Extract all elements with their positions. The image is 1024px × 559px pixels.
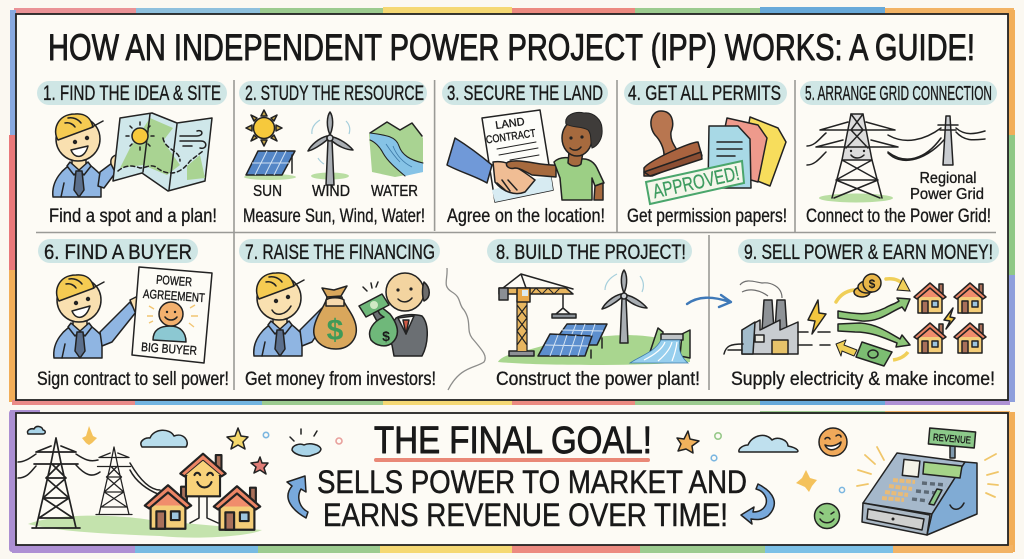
caption: step 9: Supply electricity & make income! [731,369,995,390]
caption: step 3: Agree on the location! [447,206,605,227]
icon: land contract [482,110,553,202]
panel: step 1 find the idea and site [37,81,227,227]
icon: lightning and power line [798,300,830,345]
panel: step 7 raise the financing [239,239,485,390]
icon: land contract: CONTRACT [485,128,537,146]
caption: step 2: Measure Sun, Wind, Water! [243,206,425,227]
icon: wind turbine [602,270,647,343]
icon: investor with cash [359,273,429,356]
icon: permit papers [708,117,786,188]
labels: sun wind water: WATER [371,183,418,200]
decorative squiggle [446,268,485,390]
heading: step 4: 4. GET ALL PERMITS [628,82,781,105]
top panel frame [9,7,1015,405]
icon: wind turbine [308,112,353,185]
heading: step 3 [442,81,608,105]
icon: three houses with smile [145,454,260,530]
icon: engineer with money bag [254,273,356,356]
icon: green ground [28,516,262,538]
icon: sun and solar panel [244,110,296,180]
arrow: step 8 to step 9 [687,295,731,307]
icon: pylons with power lines [18,438,160,528]
panel: final goal banner [9,410,1015,553]
heading: step 6: 6. FIND A BUYER [44,241,192,264]
icon: map with sun and wind [113,113,212,191]
icon: handshake [447,138,556,194]
heading: step 7 [239,239,440,264]
heading: step 2: 2. STUDY THE RESOURCE [245,82,424,105]
panel: step 6 find a buyer [37,239,229,390]
poster: power agreement: AGREEMENT [143,287,206,305]
panel: step 9 sell power and earn money [724,239,999,390]
heading: step 8: 8. BUILD THE PROJECT! [496,241,686,264]
icon: power lines and pole [807,116,985,165]
icon: green ground [498,335,690,365]
stamp: approved: APPROVED! [651,163,742,203]
labels: sun wind water: SUN [253,183,282,200]
icon: engineer with money bag: $ [327,314,344,347]
icon: factory [724,281,798,354]
poster: power agreement: POWER [156,273,193,289]
heading: step 1: 1. FIND THE IDEA & SITE [43,82,221,105]
labels: sun wind water [253,183,418,200]
icon: engineer with hard hat [53,114,120,197]
heading: the final goal: THE FINAL GOAL! [374,420,652,462]
caption: step 8: Construct the power plant! [496,369,700,390]
icon: flow arrows with coins and cash [836,274,910,366]
caption: step 4: Get permission papers! [627,206,787,227]
icon: houses [914,283,986,353]
poster: power agreement: BIG BUYER [141,340,197,358]
icon: flow arrows with coins and cash: $ [869,277,876,291]
label: regional power grid: Power Grid [910,186,984,203]
label: regional power grid: Regional [920,170,976,187]
poster: power agreement [132,267,212,363]
arrow: curved blue right [741,484,774,524]
icon: land contract: LAND [495,116,525,132]
decorations: stars and faces right [677,428,847,528]
panel: step 5 arrange grid connection [800,81,997,227]
caption: step 7: Get money from investors! [245,369,436,390]
icon: investor with cash: $ [382,328,390,344]
icon: cash register [857,428,998,535]
panel: step 8 build the project [487,239,731,390]
heading: step 7: 7. RAISE THE FINANCING [245,241,435,264]
stamp: approved [646,161,744,204]
label: regional power grid [910,170,984,203]
decorations: clouds and stars left [28,426,342,474]
icon: river and hills [369,122,423,177]
panel: step 2 study the resource [239,81,427,227]
caption: step 6: Sign contract to sell power! [37,369,229,390]
panel grid dividers [36,80,996,390]
heading: step 2 [239,81,427,105]
icon: construction crane [499,274,576,356]
labels: sun wind water: WIND [312,183,350,200]
arrow: curved blue left [287,476,308,518]
icon: engineer presenting [54,275,142,358]
text: sells power to market and earns revenue over time: EARNS REVENUE OVER TIME! [323,497,728,533]
text: sells power to market and earns revenue over time: SELLS POWER TO MARKET AND [317,464,747,500]
caption: step 1: Find a spot and a plan! [49,206,217,227]
icon: cash register: REVENUE [932,432,972,447]
panel: step 3 secure the land [442,81,608,227]
heading: step 3: 3. SECURE THE LAND [447,82,603,105]
icon: rubber stamp [644,111,702,176]
panel: step 4 get all permits [624,81,787,227]
icon: solar panels [538,324,607,358]
icon: smiling pylon [816,114,898,202]
icon: smiling person in green [554,112,604,200]
icon: hydro dam [630,328,690,363]
banner frame [9,410,1015,553]
text: sells power to market and earns revenue over time [317,464,747,533]
